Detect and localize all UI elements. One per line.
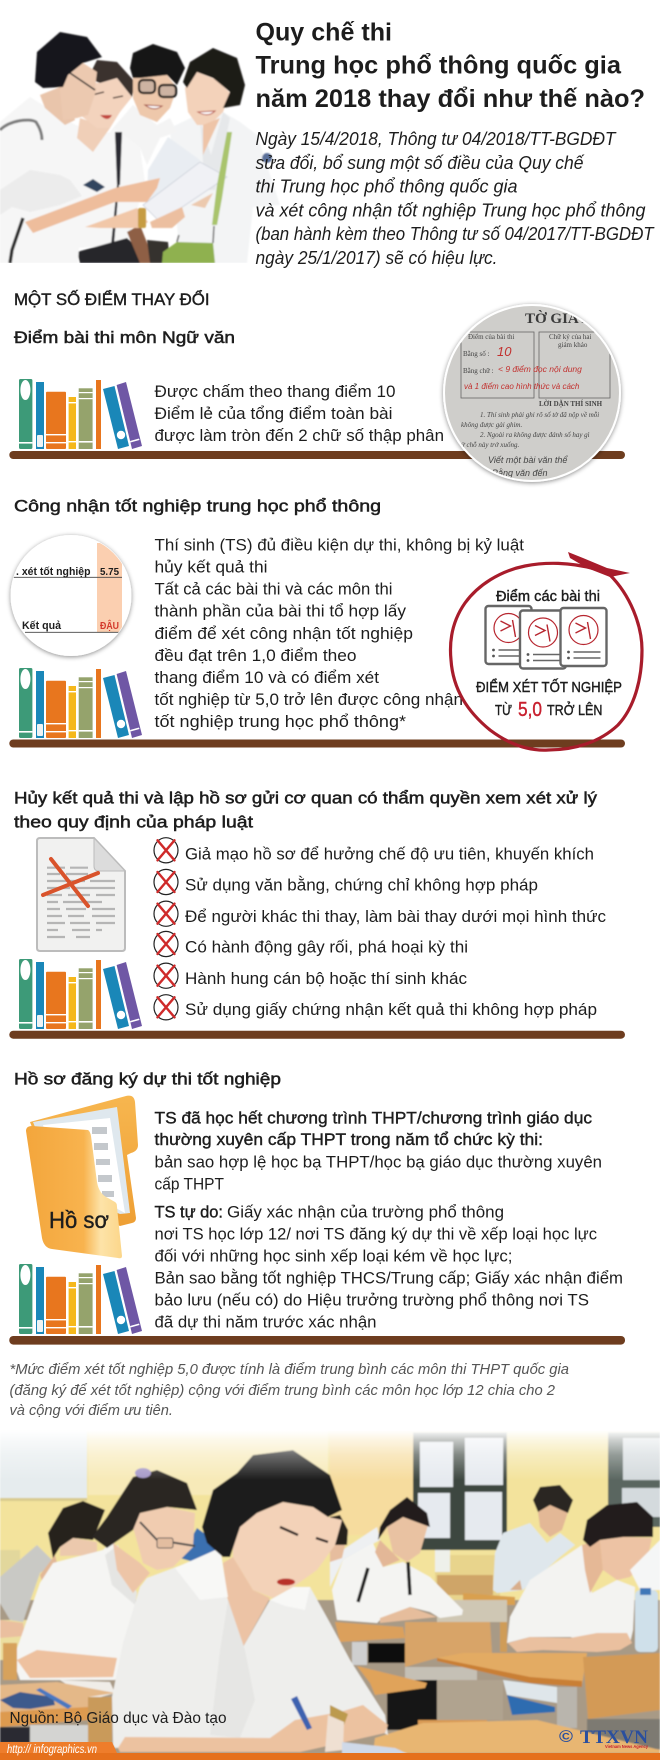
text block: conditions: thành phần của bài thi tổ hợp lấy: [154, 602, 406, 621]
arms and hands: [25, 178, 160, 233]
photo: answer sheet in circle: Điểm của bài thi: [468, 333, 515, 341]
text block: scoring: Điểm lẻ của tổng điểm toàn bài: [154, 404, 392, 423]
text block: conditions: hủy kết quả thi: [154, 558, 268, 577]
label: dossier: Hồ sơ: [49, 1207, 109, 1233]
heading: cancellation: theo quy định của pháp luật: [14, 813, 253, 831]
footnote: (đăng ký để xét tốt nghiệp) cộng với điểm trung bình các môn học lớp 12 chia cho 2: [10, 1383, 555, 1399]
photo: answer sheet in circle: LỜI DẶN THÍ SINH: [539, 400, 603, 408]
label: from 5.0 upward: TỪ: [495, 702, 512, 719]
boy 1: [0, 97, 82, 263]
shelf: [9, 740, 625, 748]
icon: books: [19, 668, 142, 738]
photo: answer sheet in circle: TỜ GIẤY: [525, 310, 590, 327]
label: graduation score: ĐIỂM XÉT TỐT NGHIỆP: [476, 678, 622, 696]
logo: TTXVN: TTXVN: [580, 1727, 648, 1748]
text block: scoring: được làm tròn đến 2 chữ số thập phân: [154, 426, 444, 445]
photo: answer sheet in circle: < 9 điểm đọc nội dung: [498, 364, 582, 374]
boy: [493, 1523, 575, 1593]
list: violations: [154, 838, 606, 1020]
list: violations: Hành hung cán bộ hoặc thí sinh khác: [185, 969, 467, 988]
text block: conditions: Tất cả các bài thi và các môn thi: [154, 580, 392, 599]
girl 2 head: [80, 78, 132, 128]
text block: independent candidates: nơi TS học lớp 12/ nơi TS đăng ký dự thi về xếp loại học lực: [154, 1224, 597, 1243]
icon: books: [19, 1264, 142, 1334]
list: violations: Sử dụng văn bằng, chứng chỉ không hợp pháp: [185, 876, 538, 895]
chart: score sheet in circle: 5.75: [100, 566, 119, 578]
photo: students reading exam results: [0, 32, 280, 263]
title: năm 2018 thay đổi như thế nào?: [256, 85, 645, 113]
panel: literature exam score: [9, 300, 630, 490]
photo: answer sheet in circle: từ chỗ này trở xuống.: [459, 441, 519, 449]
left desk and chair: [3, 1643, 17, 1680]
heading: cancellation: Hủy kết quả thi và lập hồ sơ gửi cơ quan có thẩm quyền xem xét xử lý: [14, 789, 598, 807]
source: Nguồn: Bộ Giáo dục và Đào tạo: [10, 1710, 227, 1727]
panel: registration dossier: [9, 1070, 625, 1345]
title: [256, 18, 645, 113]
icon: exam papers: [486, 606, 606, 668]
text block: current students: thường xuyên cấp THPT trong năm tổ chức kỳ thi:: [154, 1130, 543, 1149]
intro paragraph: thi Trung học phổ thông quốc gia: [256, 177, 518, 197]
chart: score sheet in circle: . xét tốt nghiệp: [16, 566, 91, 578]
logo: TTXVN: ©: [559, 1727, 574, 1746]
photo: answer sheet in circle: Viết một bài văn thể: [488, 455, 568, 465]
glasses girl: [13, 1540, 135, 1680]
shelf: [9, 1031, 625, 1039]
photo: answer sheet in circle: Bằng số :: [463, 350, 490, 358]
list: violations: Giả mạo hồ sơ để hưởng chế độ ưu tiên, khuyến khích: [185, 844, 594, 863]
hand drawn red circle: [451, 552, 642, 750]
intro paragraph: sửa đổi, bổ sung một số điều của Quy chế: [256, 153, 585, 173]
icon: books: [19, 959, 142, 1029]
panel: cancellation of results: [9, 789, 625, 1039]
text block: scoring: Được chấm theo thang điểm 10: [154, 382, 396, 401]
text block: conditions: tốt nghiệp từ 5,0 trở lên được công nhận: [154, 690, 463, 709]
text block: independent candidates: đối với những học sinh xếp loại kém về học lực;: [154, 1246, 512, 1265]
logo: TTXVN: Vietnam News Agency: [605, 1744, 648, 1749]
text block: conditions: thang điểm 10 và có điểm xét: [154, 668, 379, 687]
text block: independent candidates: Bản sao bằng tốt nghiệp THCS/Trung cấp; Giấy xác nhận điểm: [154, 1268, 623, 1287]
intro paragraph: và xét công nhận tốt nghiệp Trung học phổ thông: [256, 201, 646, 221]
text block: conditions: [154, 536, 524, 731]
footnote: [10, 1362, 569, 1419]
heading: literature score: Điểm bài thi môn Ngữ văn: [14, 329, 235, 347]
callout: pass threshold in red circle: [451, 552, 642, 750]
label: from 5.0 upward: 5,0: [518, 699, 542, 721]
list: violations: Sử dụng giấy chứng nhận kết quả thi không hợp pháp: [185, 1000, 597, 1019]
panel: graduation recognition: [9, 498, 642, 750]
photo: answer sheet in circle: Bằng văn đến: [492, 468, 548, 478]
footer band: [0, 1742, 660, 1760]
heading: dossier: Hồ sơ đăng ký dự thi tốt nghiệp: [14, 1070, 281, 1088]
photo: answer sheet in circle: 2. Ngoài ra không được đánh số hay gì: [480, 431, 590, 439]
label: from 5.0 upward: [495, 699, 602, 721]
heading: graduation: Công nhận tốt nghiệp trung học phổ thông: [14, 498, 381, 516]
title: Quy chế thi: [256, 18, 392, 46]
icon: folder: [26, 1096, 138, 1258]
boy 3 head: [133, 75, 177, 122]
label: exam scores: Điểm các bài thi: [496, 588, 600, 605]
white fade at top of photo: [0, 1430, 660, 1480]
text block: conditions: Thí sinh (TS) đủ điều kiện dự thi, không bị kỷ luật: [154, 536, 524, 555]
list: violations: Để người khác thi thay, làm bài thay dưới mọi hình thức: [185, 907, 606, 926]
photo: answer sheet in circle: 1. Thí sinh phải ghi rõ số tờ đã nộp về mỗi: [480, 411, 599, 419]
middle girl behind: [330, 1527, 380, 1587]
text block: independent candidates: đã dự thi năm trước xác nhận: [154, 1312, 376, 1331]
icon: books: [19, 379, 142, 449]
lower room: [0, 1600, 660, 1760]
photo: answer sheet in circle: Bằng chữ :: [463, 367, 494, 375]
footnote: và cộng với điểm ưu tiên.: [10, 1403, 173, 1419]
icon: crossed out document: [37, 838, 125, 951]
text block: current students: [154, 1108, 602, 1193]
text block: current students: bản sao hợp lệ học bạ THPT/học bạ giáo dục thường xuyên: [154, 1152, 602, 1171]
right girl: [507, 1545, 635, 1643]
bag and strap: [212, 132, 232, 225]
text block: conditions: tốt nghiệp trung học phổ thông*: [154, 712, 406, 731]
label: from 5.0 upward: TRỞ LÊN: [547, 701, 602, 719]
text block: current students: TS đã học hết chương trình THPT/chương trình giáo dục: [154, 1108, 592, 1127]
shelf: [9, 451, 625, 459]
footnote: *Mức điểm xét tốt nghiệp 5,0 được tính là điểm trung bình các môn thi THPT quốc gia: [10, 1362, 569, 1378]
text block: independent candidates: TS tự do:: [154, 1203, 223, 1222]
text block: conditions: đều đạt trên 1,0 điểm theo: [154, 646, 356, 665]
shelf: [9, 1336, 625, 1345]
photo: answer sheet in circle: giám khảo: [558, 341, 588, 349]
papers: [147, 137, 200, 202]
url: http:// infographics.vn: [7, 1744, 97, 1756]
heading: cancellation: [14, 789, 598, 831]
intro paragraph: [256, 129, 655, 268]
photo: answer sheet in circle: và 1 điểm cao hình thức và cách: [464, 382, 580, 391]
desks and chairs: [335, 1622, 405, 1642]
intro paragraph: ngày 25/1/2017) sẽ có hiệu lực.: [256, 248, 498, 268]
title: Trung học phổ thông quốc gia: [256, 52, 622, 80]
wall and windows: [0, 1425, 660, 1605]
photo: students in exam room: [0, 1425, 660, 1760]
chart: score sheet in circle: [10, 535, 132, 656]
far left girl: [0, 1545, 55, 1622]
heading: some changes: MỘT SỐ ĐIỂM THAY ĐỔI: [14, 289, 210, 309]
chart: score sheet in circle: ĐẬU: [100, 619, 119, 632]
list: violations: Có hành động gây rối, phá hoại kỳ thi: [185, 938, 468, 957]
text block: independent candidates: [154, 1203, 623, 1331]
photo: answer sheet in circle: 10: [497, 344, 512, 359]
text block: independent candidates: bảo lưu (nếu có) do Hiệu trưởng trường phổ thông nơi TS: [154, 1290, 589, 1309]
text block: scoring: [154, 382, 444, 445]
main girl: [223, 1557, 270, 1647]
girl 4 head: [185, 72, 230, 125]
photo: answer sheet in circle: [440, 300, 630, 490]
intro paragraph: Ngày 15/4/2018, Thông tư 04/2018/TT-BGDĐT: [256, 129, 617, 149]
text block: conditions: điểm để xét công nhận tốt nghiệp: [154, 624, 413, 643]
chart: score sheet in circle: Kết quả: [22, 620, 62, 632]
text block: current students: cấp THPT: [154, 1174, 224, 1193]
photo: answer sheet in circle: không được gài ghim.: [461, 421, 522, 429]
photo: answer sheet in circle: Chữ ký của hai: [549, 333, 592, 341]
text block: independent candidates: Giấy xác nhận của trường phổ thông: [227, 1203, 504, 1222]
